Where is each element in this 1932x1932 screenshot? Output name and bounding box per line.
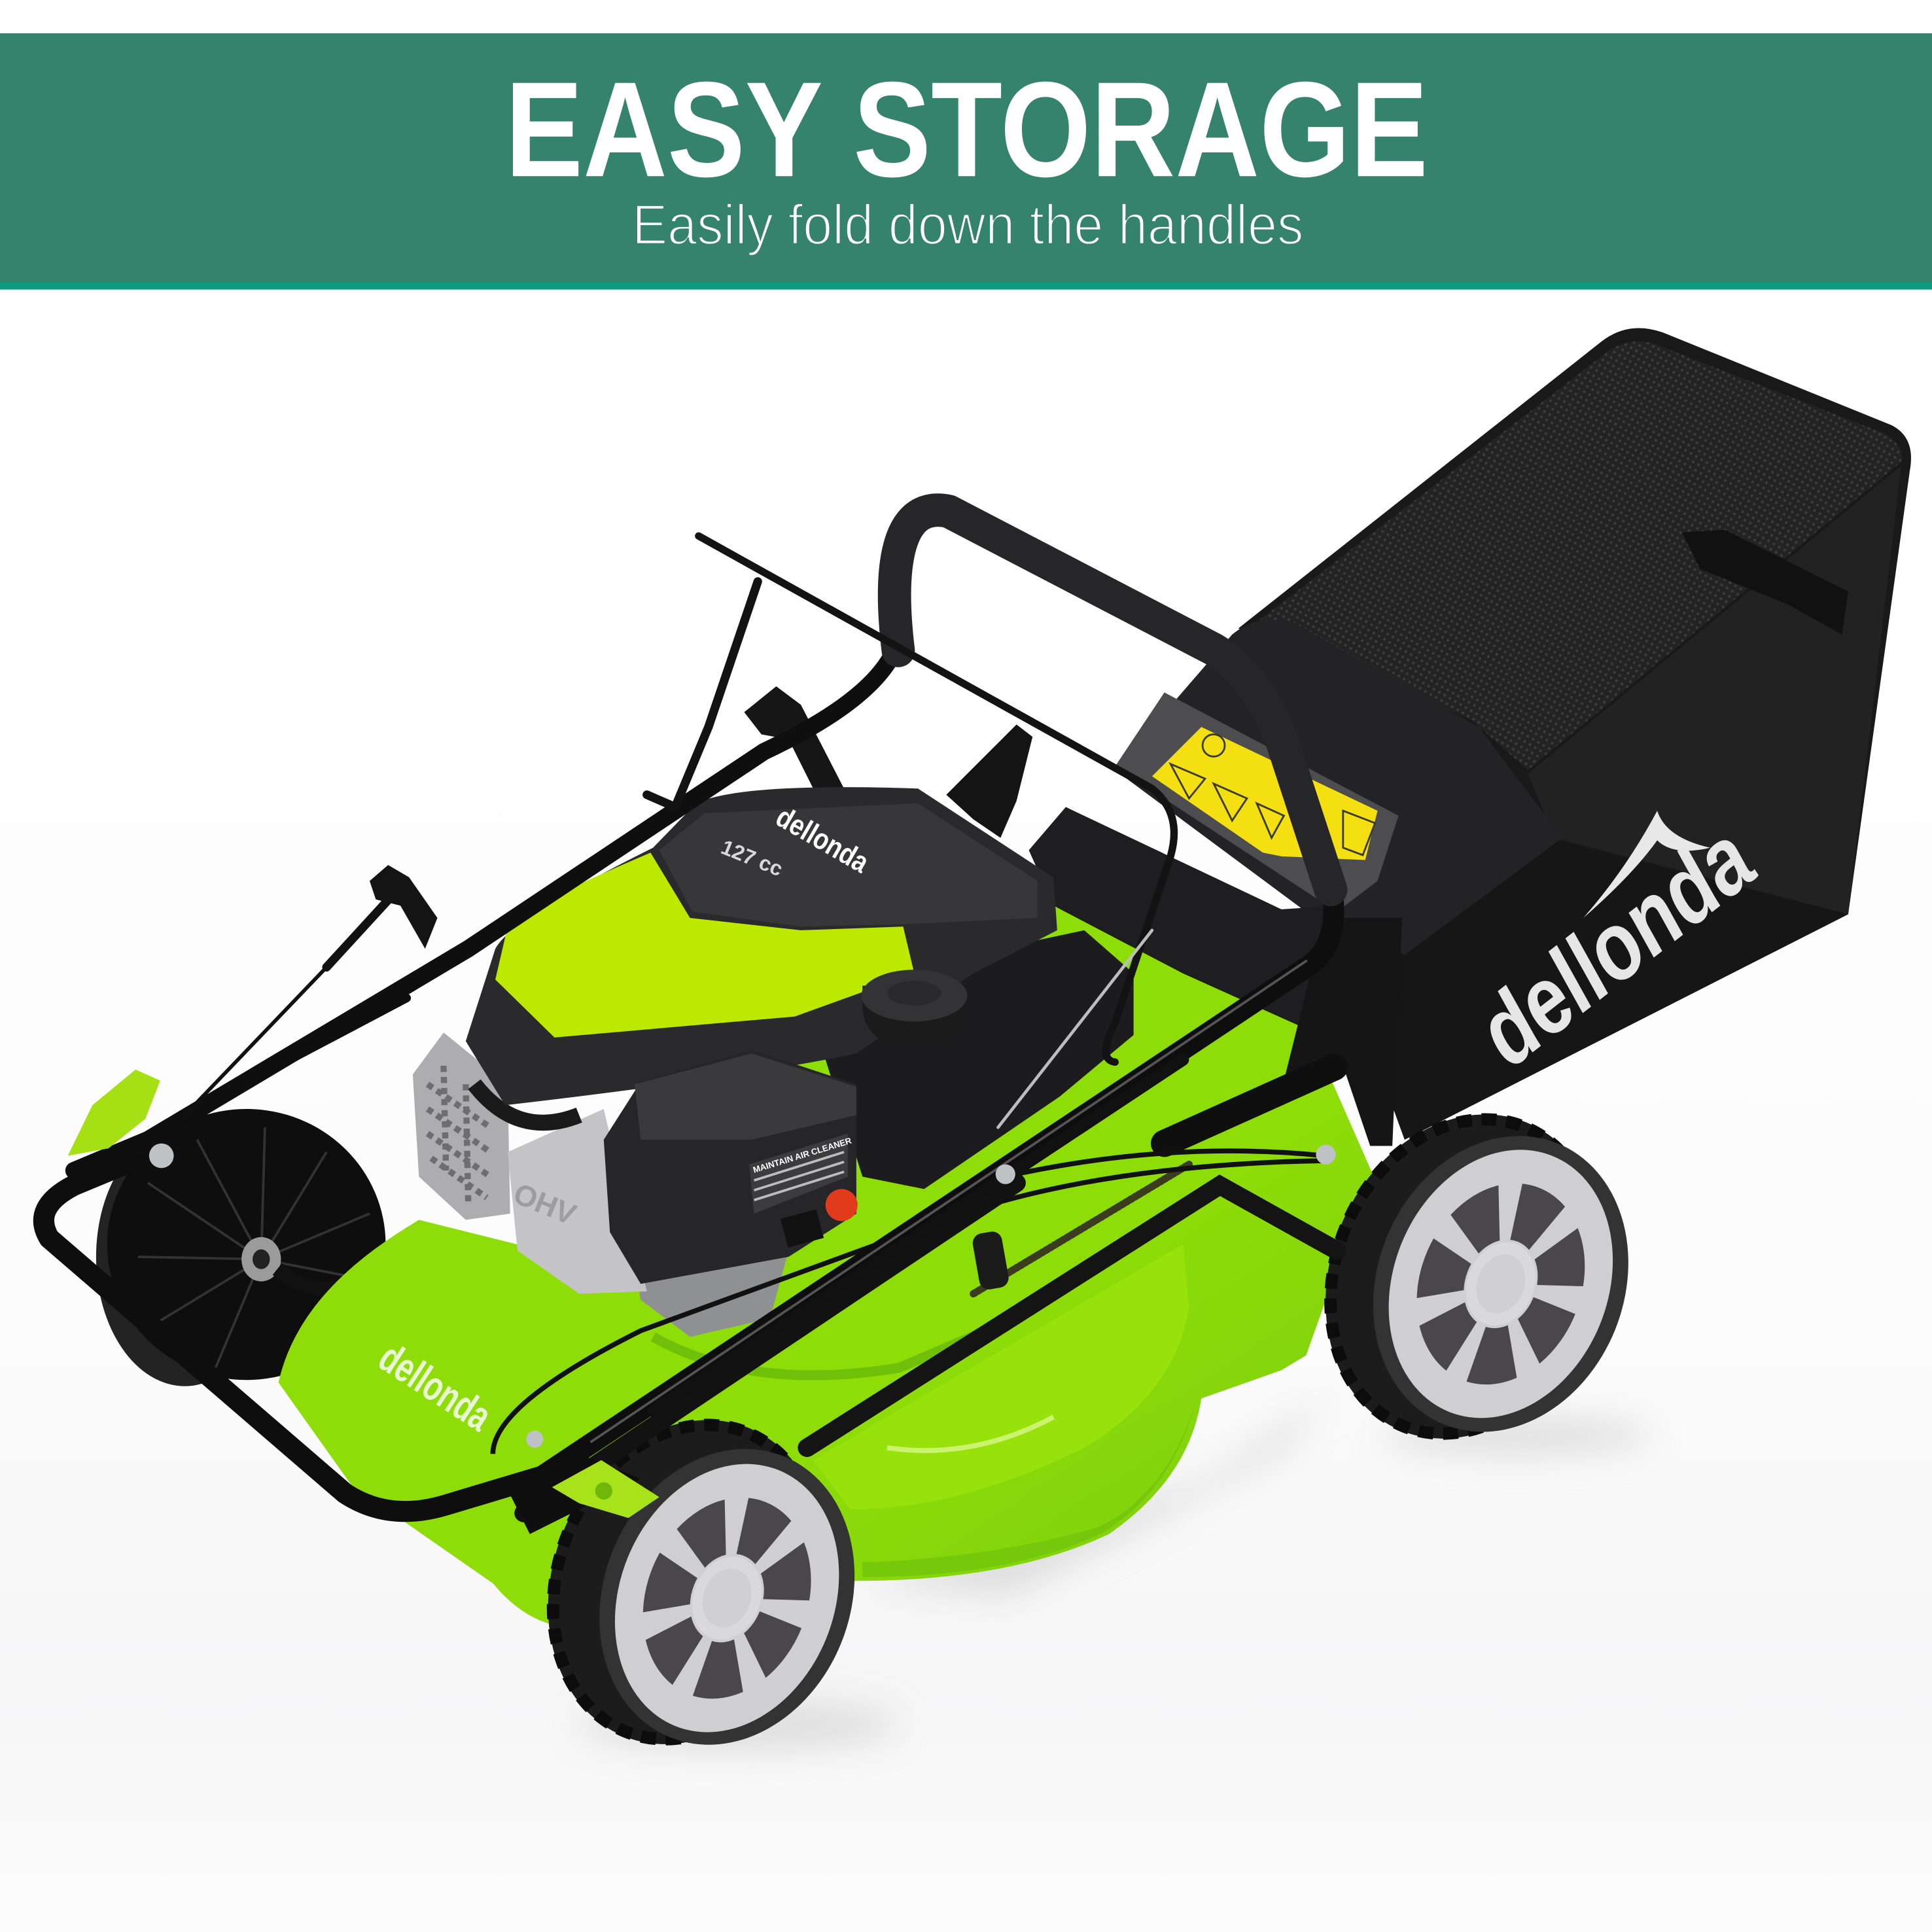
upper grip [894,510,1331,890]
title: EASY STORAGE [505,53,1428,205]
silver block: OHV [509,1176,581,1231]
engine [413,787,1134,1337]
cover top panel: 127 cc [718,835,786,881]
rear bracket [946,724,1032,838]
bag logo: dellonda [1458,806,1774,1086]
subtitle: Easily fold down the handles [632,194,1304,256]
air filter box [604,1050,858,1284]
deck logo: dellonda [371,1333,501,1441]
fuel tank [826,930,1134,1189]
grass collection bag [1238,328,1911,1140]
engine cover [466,787,1057,1105]
cover top panel [659,800,1038,926]
rear hinge box [1029,807,1337,1029]
air filter box: MAINTAIN AIR CLEANER [752,1135,853,1175]
upper handle arm [74,653,893,1170]
folded handle frame [44,510,1333,1511]
engine base [635,1251,788,1337]
lime lever clip left [68,1070,160,1156]
header banner [0,0,1932,290]
front hinge plate [505,1454,641,1534]
bolts [149,1144,1335,1448]
cables [493,1151,1325,1454]
deck skirt shading [813,1244,1189,1509]
control cable [184,967,326,1115]
side hinge bracket [1282,918,1402,1146]
warning panel [1115,692,1399,912]
bail bar [699,536,1174,1062]
lime lever clip front [552,1460,659,1518]
silver block [508,1109,647,1293]
rear right wheel [1278,1072,1672,1481]
axle and side brackets [523,1067,1337,1513]
cover top panel: dellonda [771,800,875,879]
bag side mesh [1528,466,1901,914]
rear grip knob [745,686,844,788]
small rear wheel [96,1109,385,1386]
bag body [1238,328,1911,1140]
lime cover panel [495,852,914,1038]
fuel cap [861,970,967,1050]
lower frame tube [44,900,1333,1511]
throttle rod [998,930,1152,1127]
cable clip [971,1230,1010,1291]
yellow warning label [1152,727,1378,860]
rear hood [1115,620,1562,955]
metal guard [413,1032,510,1220]
front right wheel [501,1378,898,1786]
ground shadows [579,1392,1651,1749]
control knob [370,865,438,949]
bag mesh top [1257,342,1902,770]
mower deck [279,905,1374,1626]
